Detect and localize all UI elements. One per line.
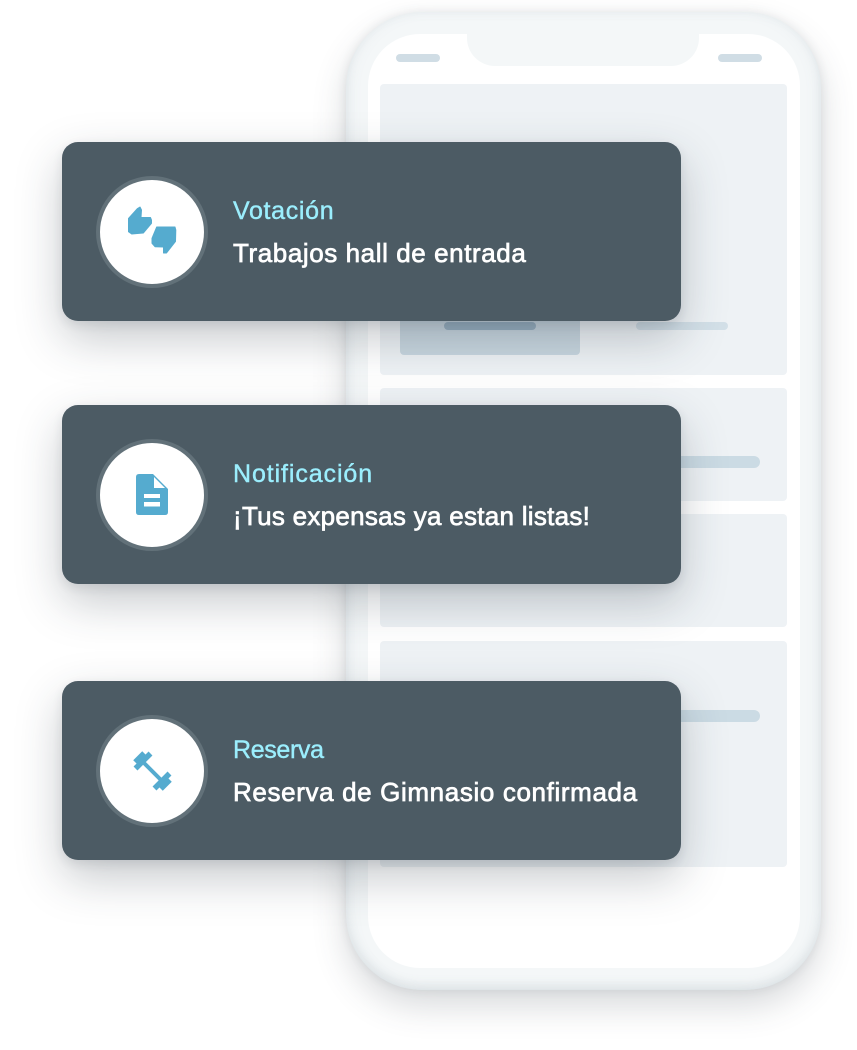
label: Votación: Votación <box>233 197 334 225</box>
icon: document <box>96 439 208 551</box>
phone mockup <box>346 12 821 990</box>
title: Trabajos hall de entrada: Trabajos hall de entrada <box>233 238 526 268</box>
label: Reserva: Reserva <box>233 736 324 764</box>
content panel 1 <box>380 84 787 375</box>
title: expensas: ¡Tus expensas ya estan listas! <box>233 501 590 531</box>
content panel 3 <box>380 514 787 627</box>
notch <box>467 34 699 66</box>
icon: thumbs up and down <box>96 176 208 288</box>
image placeholder <box>400 264 580 355</box>
placeholder bar light <box>636 322 728 330</box>
card: reserva <box>62 681 681 860</box>
placeholder bar dark <box>444 322 536 330</box>
icon: dumbbell <box>96 715 208 827</box>
placeholder bar <box>660 710 760 722</box>
card: notificación <box>62 405 681 584</box>
right speaker <box>718 54 762 62</box>
content panel 2 <box>380 388 787 501</box>
phone screen <box>368 34 800 968</box>
title: Reserva de Gimnasio confirmada: Reserva de Gimnasio confirmada <box>233 777 638 807</box>
label: Notificación: Notificación <box>233 460 373 488</box>
card: votación <box>62 142 681 321</box>
placeholder bar <box>660 456 760 468</box>
left speaker <box>396 54 440 62</box>
content panel 4 <box>380 641 787 867</box>
